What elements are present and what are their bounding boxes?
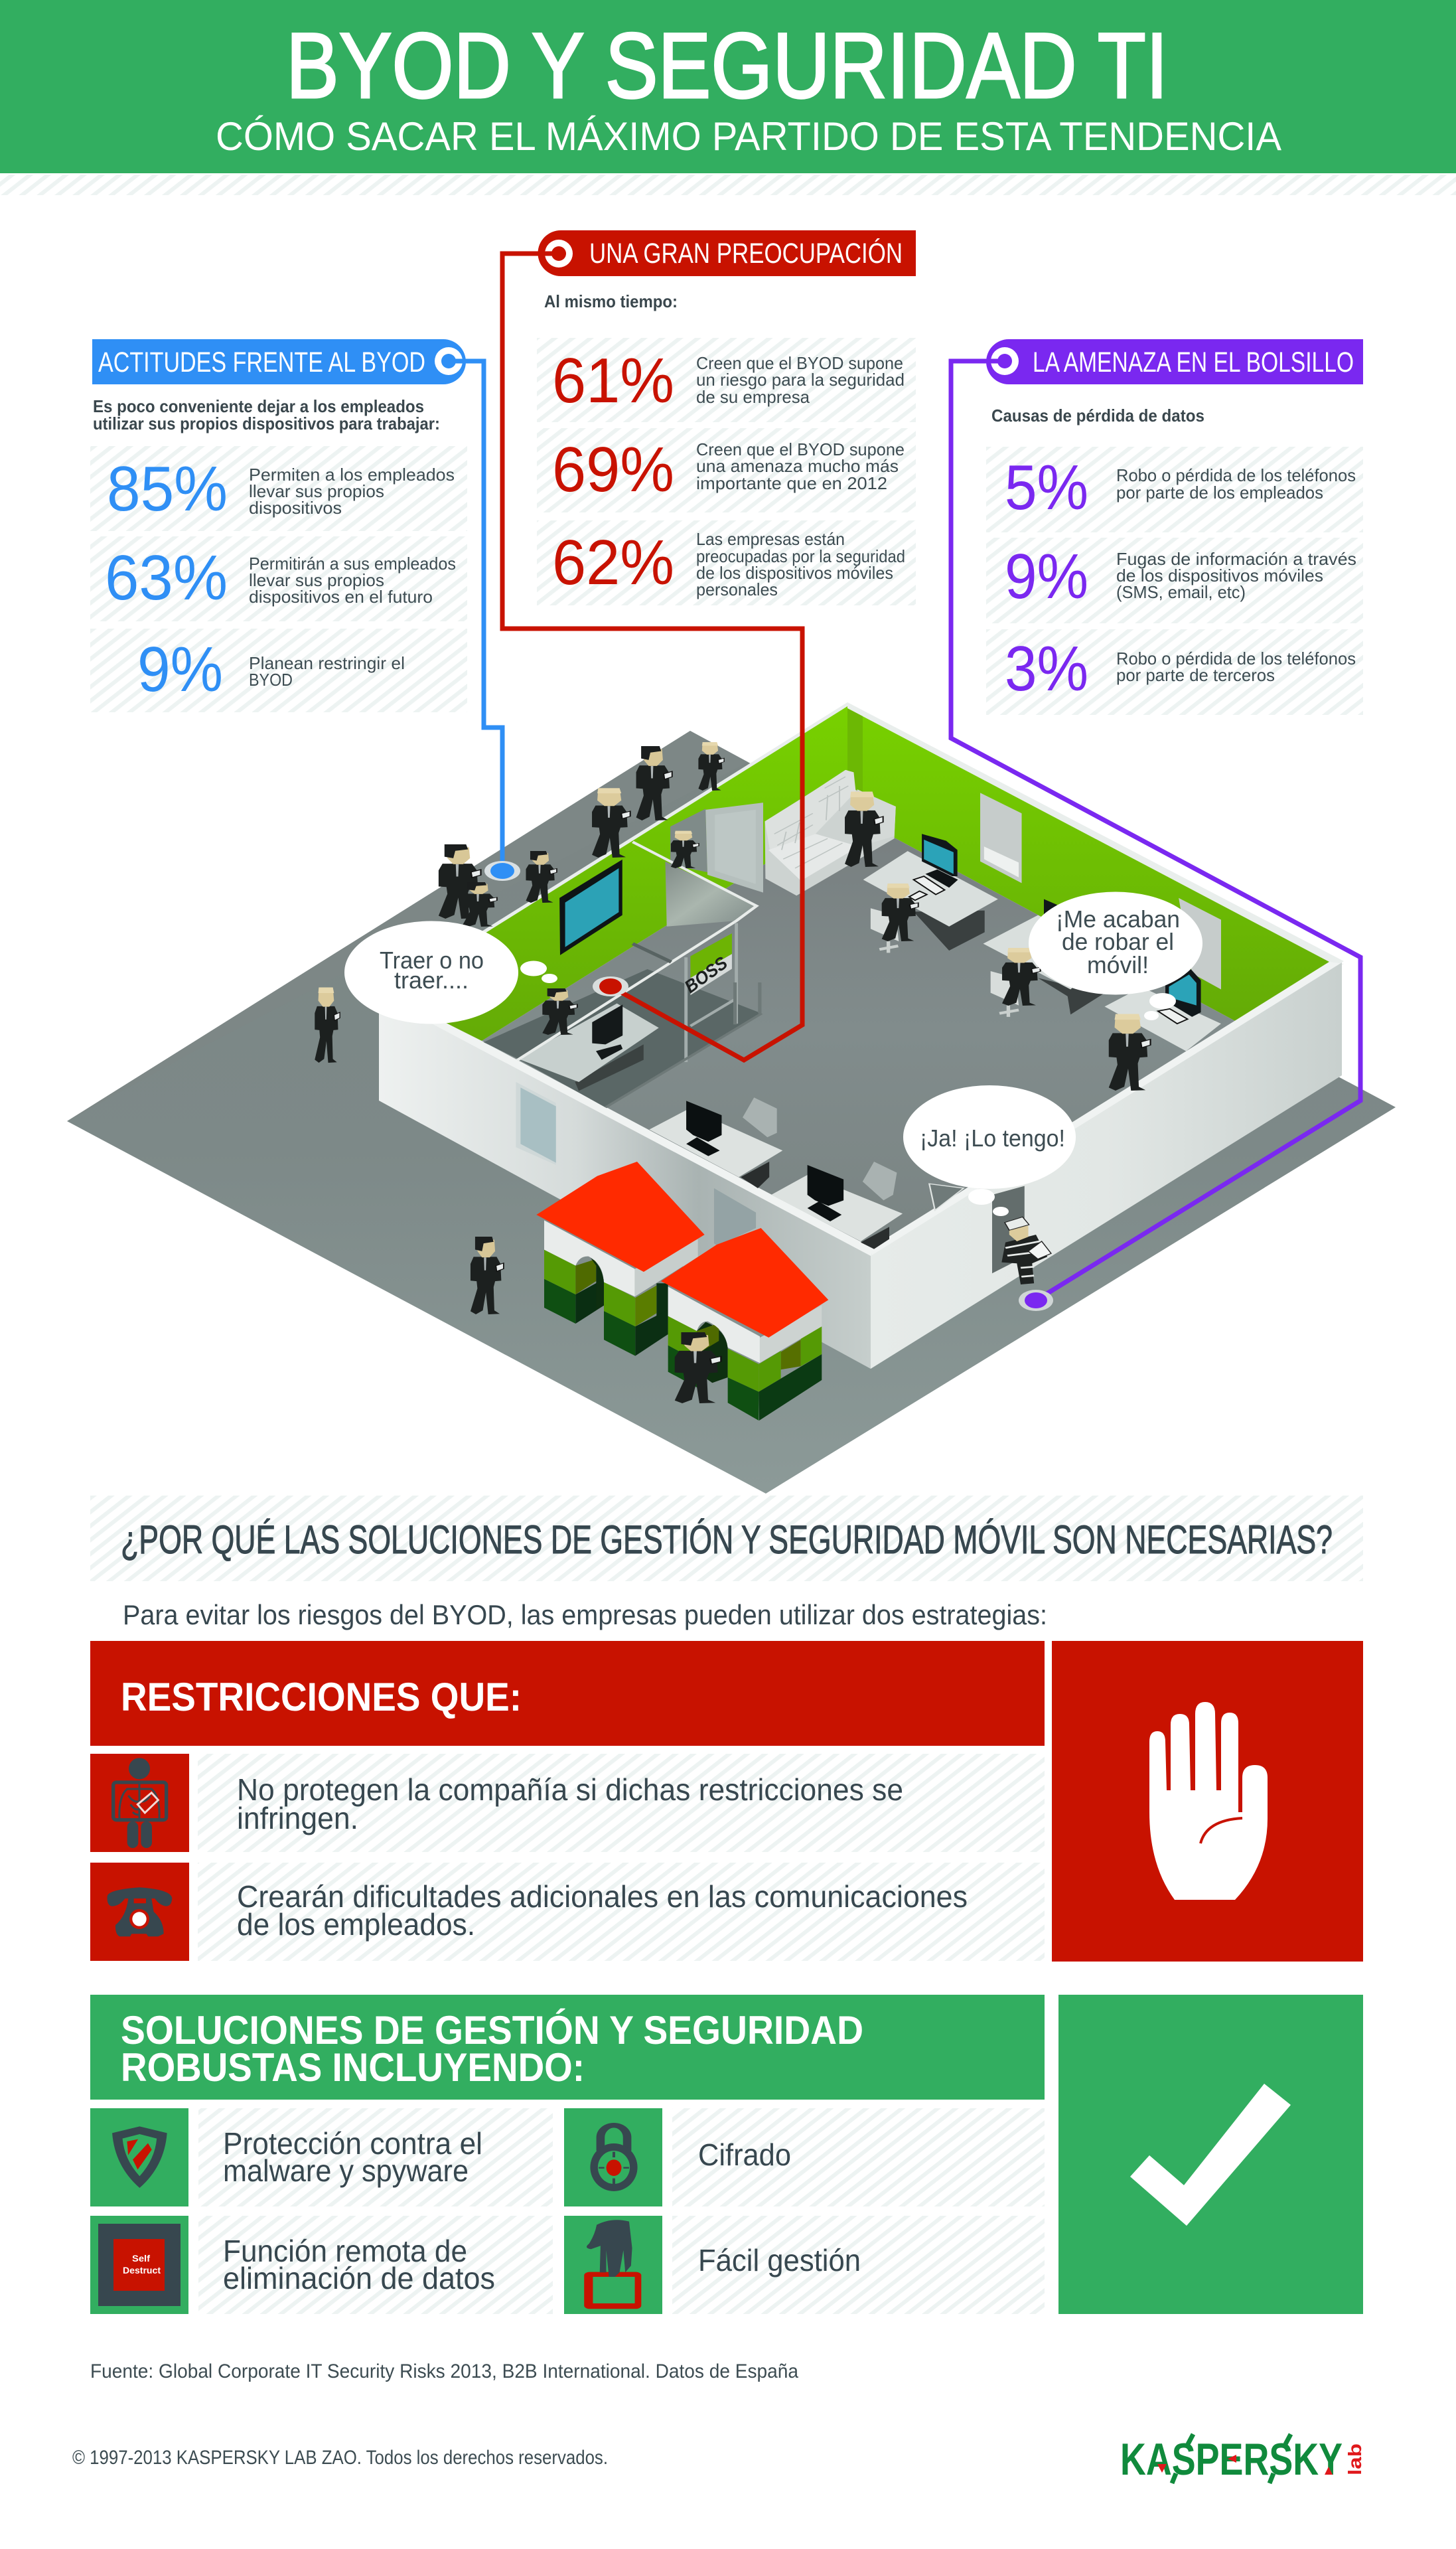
house 1	[536, 1162, 705, 1356]
header banner	[0, 0, 1456, 173]
intro text: Al mismo tiempo:	[544, 291, 678, 311]
stat 61%: Creen que el BYOD supone	[696, 353, 903, 373]
icon: self destruct	[90, 2216, 188, 2314]
desk right 1	[863, 834, 998, 953]
thought bubble: robar: de robar el	[1062, 928, 1174, 955]
icon: telephone	[90, 1863, 189, 1961]
intro text: Es poco conveniente dejar a los empleados	[93, 396, 424, 416]
stat 85%: llevar sus propios	[249, 481, 384, 501]
icon: x-ray person	[90, 1754, 189, 1852]
stat 9%	[90, 629, 467, 712]
frosted glass	[665, 862, 757, 927]
stat 63%: dispositivos en el futuro	[249, 587, 433, 607]
stat 61%: 61%	[552, 345, 674, 416]
Kaspersky logo: KASPERSKY	[1120, 2434, 1343, 2485]
stat 85%	[90, 446, 467, 531]
icon: self destruct: Destruct	[123, 2265, 161, 2276]
row: no protegen: infringen.	[237, 1801, 358, 1835]
boss desk	[518, 1004, 659, 1091]
stat 9%: BYOD	[249, 670, 293, 690]
icon: padlock	[564, 2108, 662, 2206]
header	[90, 1641, 1045, 1746]
stat 9%: 9%	[137, 634, 223, 705]
glass frames	[517, 842, 757, 1062]
stat 62%: personales	[696, 579, 778, 599]
row: crearán dificultades	[90, 1863, 1045, 1961]
open door	[670, 803, 763, 893]
header: ACTITUDES FRENTE AL BYOD	[98, 347, 425, 378]
house 2	[661, 1228, 828, 1421]
header	[90, 1995, 1045, 2100]
stat 63%: Permitirán a sus empleados	[249, 554, 456, 574]
thought bubble: lo tengo: ¡Ja! ¡Lo tengo!	[920, 1124, 1065, 1152]
stat 69%: importante que en 2012	[696, 473, 887, 493]
front right wall	[871, 963, 1342, 1369]
red connector	[502, 254, 802, 1060]
stat 9%	[986, 538, 1363, 623]
row: fácil gestión: Fácil gestión	[698, 2243, 861, 2278]
header	[538, 230, 916, 276]
green walls	[392, 706, 1329, 1041]
icon: self destruct: Self	[132, 2253, 150, 2264]
front left wall	[379, 996, 871, 1369]
intro text	[93, 396, 440, 433]
thought bubble: robar	[1029, 892, 1202, 1020]
wall monitor on green wall	[559, 860, 622, 955]
icon: hand on tablet	[564, 2216, 662, 2314]
header: SOLUCIONES DE GESTIÓN Y SEGURIDAD	[121, 2008, 863, 2052]
thought bubble: lo tengo	[903, 1085, 1076, 1216]
row: protección	[90, 2108, 553, 2206]
panel: una gran preocupación	[537, 230, 916, 605]
stat 69%	[537, 428, 916, 512]
Kaspersky logo: lab	[1345, 2443, 1365, 2475]
row: crearán dificultades: Crearán dificultades adicionales en las comunicaciones	[237, 1879, 968, 1914]
icon: shield	[90, 2108, 188, 2206]
stat 9%: (SMS, email, etc)	[1116, 582, 1246, 602]
row: función remota: Función remota de	[223, 2234, 467, 2268]
intro text: Causas de pérdida de datos	[991, 406, 1204, 425]
desks front	[649, 1097, 903, 1249]
isometric office scene	[67, 702, 1396, 1494]
panel: restricciones	[90, 1641, 1363, 1962]
stat 85%: dispositivos	[249, 498, 342, 518]
copyright: © 1997-2013 KASPERSKY LAB ZAO. Todos los derechos reservados.	[72, 2447, 608, 2469]
stat 5%: por parte de los empleados	[1116, 483, 1323, 502]
stat 63%	[90, 536, 467, 621]
intro text: utilizar sus propios dispositivos para trabajar:	[93, 414, 440, 433]
row: protección: malware y spyware	[223, 2153, 469, 2188]
stat 63%: llevar sus propios	[249, 570, 384, 590]
thought bubble: robar: ¡Me acaban	[1056, 905, 1180, 933]
wall top band right	[871, 962, 1344, 1259]
header: UNA GRAN PREOCUPACIÓN	[589, 238, 903, 270]
header	[985, 339, 1363, 384]
stat 63%: 63%	[105, 542, 228, 613]
icon: check mark	[1058, 1995, 1363, 2314]
row: fácil gestión	[564, 2216, 1045, 2314]
stat 61%	[537, 338, 916, 422]
icon: stop hand	[1052, 1641, 1363, 1962]
stat 3%: 3%	[1005, 633, 1088, 704]
row: no protegen: No protegen la compañía si dichas restricciones se	[237, 1772, 903, 1807]
stat 5%: Robo o pérdida de los teléfonos	[1116, 465, 1356, 485]
window blinds on green wall	[980, 793, 1221, 989]
stat 62%	[537, 520, 916, 605]
blue connector	[449, 361, 520, 881]
header: ROBUSTAS INCLUYENDO:	[121, 2045, 585, 2090]
intro strategies text: Para evitar los riesgos del BYOD, las empresas pueden utilizar dos estrategias:	[123, 1599, 1047, 1630]
source note: Fuente: Global Corporate IT Security Risks 2013, B2B International. Datos de España	[90, 2360, 798, 2382]
purple connector	[951, 361, 1360, 1311]
row: función remota	[90, 2216, 553, 2314]
wall tops	[379, 702, 1344, 1257]
stat 3%	[986, 629, 1363, 715]
stat 69%: Creen que el BYOD supone	[696, 439, 905, 459]
doorway and thief door	[929, 1184, 1025, 1273]
windows on front left wall	[516, 1082, 756, 1246]
row: cifrado: Cifrado	[698, 2137, 791, 2172]
stat 9%: 9%	[1005, 541, 1088, 612]
man by the house	[675, 1332, 721, 1403]
office floor	[482, 812, 1235, 1249]
desk right 3	[1105, 969, 1221, 1051]
stat 9%: Planean restringir el	[249, 653, 405, 673]
boss glass office	[484, 842, 762, 1107]
panel: la amenaza en el bolsillo	[985, 339, 1363, 715]
header	[92, 339, 469, 384]
row: crearán dificultades: de los empleados.	[237, 1907, 475, 1942]
header: LA AMENAZA EN EL BOLSILLO	[1033, 347, 1354, 378]
panel: actitudes frente al BYOD	[90, 339, 469, 712]
boss door sign: BOSS	[681, 953, 731, 997]
subtitle: CÓMO SACAR EL MÁXIMO PARTIDO DE ESTA TENDENCIA	[216, 114, 1281, 159]
row: protección: Protección contra el	[223, 2126, 482, 2161]
stat 62%: de los dispositivos móviles	[696, 563, 893, 583]
stat 69%: 69%	[552, 434, 674, 505]
stat 9%: Fugas de información a través	[1116, 549, 1356, 569]
stat 3%: Robo o pérdida de los teléfonos	[1116, 649, 1356, 668]
sofa	[764, 770, 896, 895]
thief	[1001, 1217, 1051, 1284]
stat 61%: de su empresa	[696, 387, 810, 407]
row: cifrado	[564, 2108, 1045, 2206]
stat 85%: 85%	[107, 453, 228, 524]
thought bubble: traer: Traer o no	[380, 947, 484, 974]
wall top band left	[379, 996, 873, 1257]
stat 5%	[986, 447, 1363, 532]
desk right 2	[983, 899, 1112, 1017]
stat 62%: Las empresas están	[696, 529, 845, 549]
office floor	[484, 969, 762, 1107]
row: no protegen	[90, 1754, 1045, 1852]
section heading: por qué	[90, 1496, 1363, 1581]
panel: soluciones	[90, 1995, 1363, 2314]
title: BYOD Y SEGURIDAD TI	[286, 13, 1168, 117]
stat 85%: Permiten a los empleados	[249, 465, 455, 485]
thought bubble: robar: móvil!	[1087, 951, 1149, 978]
stat 5%: 5%	[1005, 452, 1088, 523]
header: RESTRICCIONES QUE:	[121, 1675, 522, 1719]
stat 9%: de los dispositivos móviles	[1116, 566, 1323, 585]
people in the office	[315, 742, 1151, 1314]
thought bubble: traer	[344, 921, 557, 1024]
stat 69%: una amenaza mucho más	[696, 456, 899, 476]
stat 3%: por parte de terceros	[1116, 665, 1275, 685]
stat 62%: 62%	[552, 527, 674, 598]
row: función remota: eliminación de datos	[223, 2261, 495, 2295]
stat 62%: preocupadas por la seguridad	[696, 546, 905, 566]
thought bubble: traer: traer....	[394, 966, 469, 994]
stat 61%: un riesgo para la seguridad	[696, 370, 905, 390]
ground	[67, 731, 1396, 1494]
red roof houses	[536, 1162, 828, 1421]
